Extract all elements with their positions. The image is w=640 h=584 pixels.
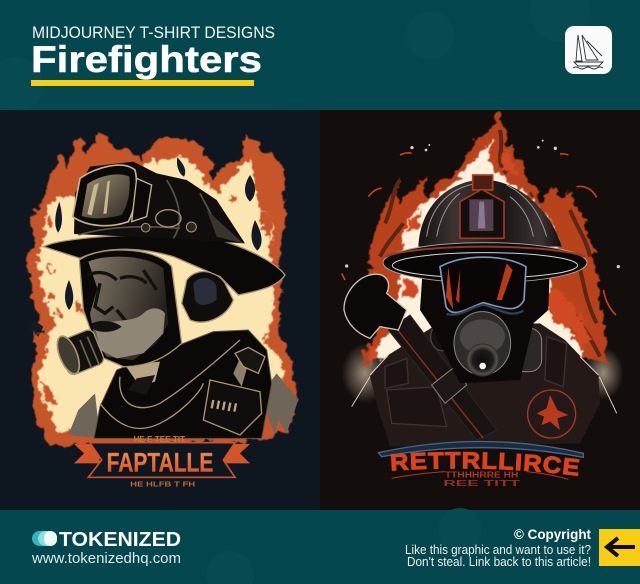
harness and pockets — [385, 337, 567, 427]
flames: white core — [370, 138, 583, 363]
coat — [94, 330, 272, 438]
helmet brim — [383, 243, 587, 283]
helmet goggles — [73, 165, 152, 226]
banner small text top: HE E TEE TIT — [133, 435, 185, 444]
patch emblem — [528, 390, 576, 438]
helmet crown — [74, 162, 245, 243]
banner small text bottom: HE HLFB T FH — [130, 480, 195, 489]
face — [88, 257, 168, 360]
flames: outer orange — [362, 113, 607, 363]
arrow button — [599, 529, 640, 566]
right design artwork — [341, 110, 622, 488]
panel: right t-shirt design — [320, 110, 640, 510]
eye and brow lines — [87, 270, 157, 330]
mask visor lower seal — [447, 305, 523, 315]
flames: outer orange — [28, 132, 297, 447]
mask visor — [440, 257, 526, 312]
copyright notice — [405, 526, 591, 569]
brand url: www.tokenizedhq.com — [31, 550, 181, 567]
banner title: RETTRLLIRCE — [390, 452, 580, 476]
hammer tool — [344, 274, 497, 440]
flames: dark streaks — [380, 130, 600, 357]
panel: left t-shirt design — [0, 110, 320, 510]
icon: Tokenized logo — [32, 531, 57, 546]
left design artwork — [28, 132, 298, 489]
banner small text line 2: REE TITT — [443, 479, 520, 488]
copyright heading: © Copyright — [514, 526, 591, 542]
copyright line 2: Don't steal. Link back to this article! — [407, 555, 591, 569]
ear protector — [182, 272, 233, 322]
beard — [95, 308, 165, 358]
gas mask side filters — [431, 323, 542, 372]
banner small text line 1: TTHHHRRE HH — [445, 470, 519, 479]
banner title: FAPTALLE — [107, 447, 213, 477]
footer band — [0, 508, 640, 584]
body — [370, 323, 600, 447]
copyright line 1: Like this graphic and want to use it? — [405, 543, 591, 557]
glows — [342, 343, 623, 403]
brand name: TOKENIZED — [59, 528, 181, 551]
helmet front shield — [460, 175, 504, 238]
neck — [125, 362, 160, 387]
helmet brim — [43, 235, 285, 295]
mask hood — [420, 260, 550, 383]
flames: orange tongues in core — [368, 147, 590, 367]
header band — [0, 0, 640, 113]
hood — [79, 250, 182, 367]
helmet crown — [418, 179, 562, 247]
icon: left arrow — [607, 538, 635, 556]
banner arc — [377, 440, 584, 488]
icon: Midjourney sailboat logo — [565, 26, 612, 74]
title underline — [31, 80, 254, 86]
side embers — [342, 153, 616, 315]
flame details: dark drops — [30, 157, 262, 337]
banner ribbon — [74, 435, 250, 489]
footer brand — [31, 528, 181, 567]
flames: cream core — [38, 155, 284, 432]
fur collar — [68, 373, 298, 438]
heading: title: Firefighters — [31, 39, 262, 80]
sparks — [345, 140, 620, 268]
heading: subtitle: MIDJOURNEY T-SHIRT DESIGNS — [32, 24, 275, 42]
respirator canister — [53, 328, 105, 377]
flame details: orange flecks — [33, 147, 273, 407]
shoulder gadget — [203, 347, 265, 435]
respirator — [454, 312, 511, 377]
